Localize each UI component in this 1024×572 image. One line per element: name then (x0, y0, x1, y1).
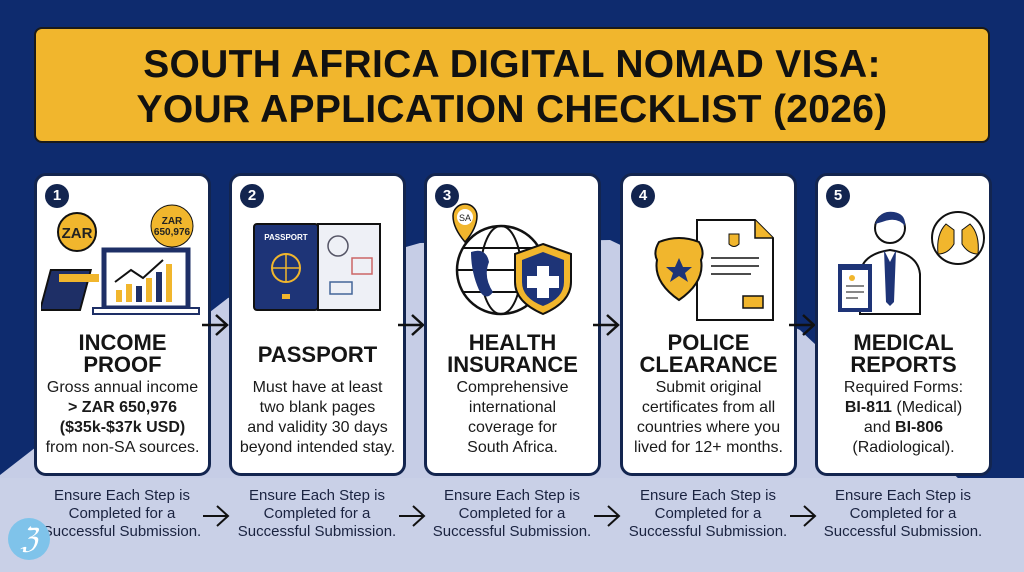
panel: health insurance (424, 173, 601, 476)
footer note 5: Ensure Each Step is (835, 487, 971, 504)
badge 2 (240, 184, 264, 208)
arrow (398, 314, 424, 336)
heading (78, 330, 166, 377)
icon: money laptop: ZAR (62, 225, 93, 242)
heading: PROOF (83, 352, 162, 377)
heading: HEALTH (469, 330, 556, 355)
footer arrow (790, 505, 816, 527)
text (456, 379, 569, 456)
footer arrow (203, 505, 230, 527)
arrow (789, 314, 815, 336)
text: and BI-806 (864, 419, 943, 436)
badge 5 (826, 184, 850, 208)
footer note 3 (433, 487, 591, 540)
footer note 2: Successful Submission. (238, 523, 396, 540)
text (46, 379, 199, 456)
panel: police clearance (620, 173, 797, 476)
icon: money laptop: 650,976 (154, 227, 191, 238)
heading: POLICE (668, 330, 749, 355)
footer note 1: Ensure Each Step is (54, 487, 190, 504)
footer arrow (594, 505, 620, 527)
text: Comprehensive (456, 379, 569, 396)
text: > ZAR 650,976 (68, 399, 177, 416)
footer note 4 (629, 487, 787, 540)
footer note 1 (43, 487, 201, 540)
text: beyond intended stay. (240, 439, 395, 456)
text: BI-811 (Medical) (845, 399, 962, 416)
panel: passport (229, 173, 406, 476)
footer note 2: Ensure Each Step is (249, 487, 385, 504)
logo watermark (8, 518, 50, 560)
icon: money laptop (41, 204, 200, 315)
text: Submit original (656, 379, 761, 396)
heading: MEDICAL (853, 330, 954, 355)
text: international (469, 399, 556, 416)
panel: medical reports (815, 173, 992, 476)
heading (639, 330, 778, 377)
text: two blank pages (260, 399, 375, 416)
arrow (202, 314, 229, 336)
footer note 1: Successful Submission. (43, 523, 201, 540)
footer note 1: Completed for a (69, 505, 175, 522)
text: lived for 12+ months. (634, 439, 783, 456)
text (240, 379, 395, 456)
footer note 4: Successful Submission. (629, 523, 787, 540)
badge 4: 4 (639, 187, 647, 204)
footer note 4: Completed for a (655, 505, 761, 522)
heading (850, 330, 957, 377)
badge 5: 5 (834, 187, 842, 204)
footer arrow (399, 505, 426, 527)
text (844, 379, 963, 456)
text: Must have at least (253, 379, 382, 396)
text: ($35k-$37k USD) (60, 419, 185, 436)
footer note 2: Completed for a (264, 505, 370, 522)
text: countries where you (637, 419, 780, 436)
text: Required Forms: (844, 379, 963, 396)
footer note 2 (238, 487, 396, 540)
icon: globe shield (452, 203, 572, 316)
badge 1: 1 (53, 187, 61, 204)
icon: passport (253, 223, 381, 311)
title: SOUTH AFRICA DIGITAL NOMAD VISA: (143, 43, 881, 86)
footer note 3: Ensure Each Step is (444, 487, 580, 504)
badge 2: 2 (248, 187, 256, 204)
text: (Radiological). (852, 439, 955, 456)
arrow (593, 314, 620, 336)
text (634, 379, 783, 456)
text: Gross annual income (47, 379, 198, 396)
icon: passport: PASSPORT (264, 233, 308, 242)
badge 1 (45, 184, 69, 208)
text: certificates from all (642, 399, 775, 416)
heading (447, 330, 578, 377)
panel: income proof (34, 173, 211, 476)
icon: badge certificate (654, 219, 774, 321)
heading: INSURANCE (447, 352, 578, 377)
footer note 4: Ensure Each Step is (640, 487, 776, 504)
badge 3: 3 (443, 187, 451, 204)
text: South Africa. (467, 439, 558, 456)
title (34, 27, 990, 143)
title: YOUR APPLICATION CHECKLIST (2026) (136, 88, 887, 131)
heading: INCOME (78, 330, 166, 355)
icon: globe shield: SA (459, 213, 471, 223)
footer note 3: Completed for a (459, 505, 565, 522)
icon: money laptop: ZAR (162, 216, 183, 227)
heading: CLEARANCE (639, 352, 778, 377)
logo watermark: ℨ (20, 523, 38, 554)
icon: doctor lungs (838, 211, 985, 315)
footer note 5 (824, 487, 982, 540)
badge 3 (435, 184, 459, 208)
heading: REPORTS (850, 352, 957, 377)
text: from non-SA sources. (46, 439, 199, 456)
badge 4 (631, 184, 655, 208)
heading: PASSPORT (258, 342, 377, 367)
footer note 5: Completed for a (850, 505, 956, 522)
text: coverage for (468, 419, 557, 436)
footer note 3: Successful Submission. (433, 523, 591, 540)
footer note 5: Successful Submission. (824, 523, 982, 540)
text: and validity 30 days (247, 419, 388, 436)
